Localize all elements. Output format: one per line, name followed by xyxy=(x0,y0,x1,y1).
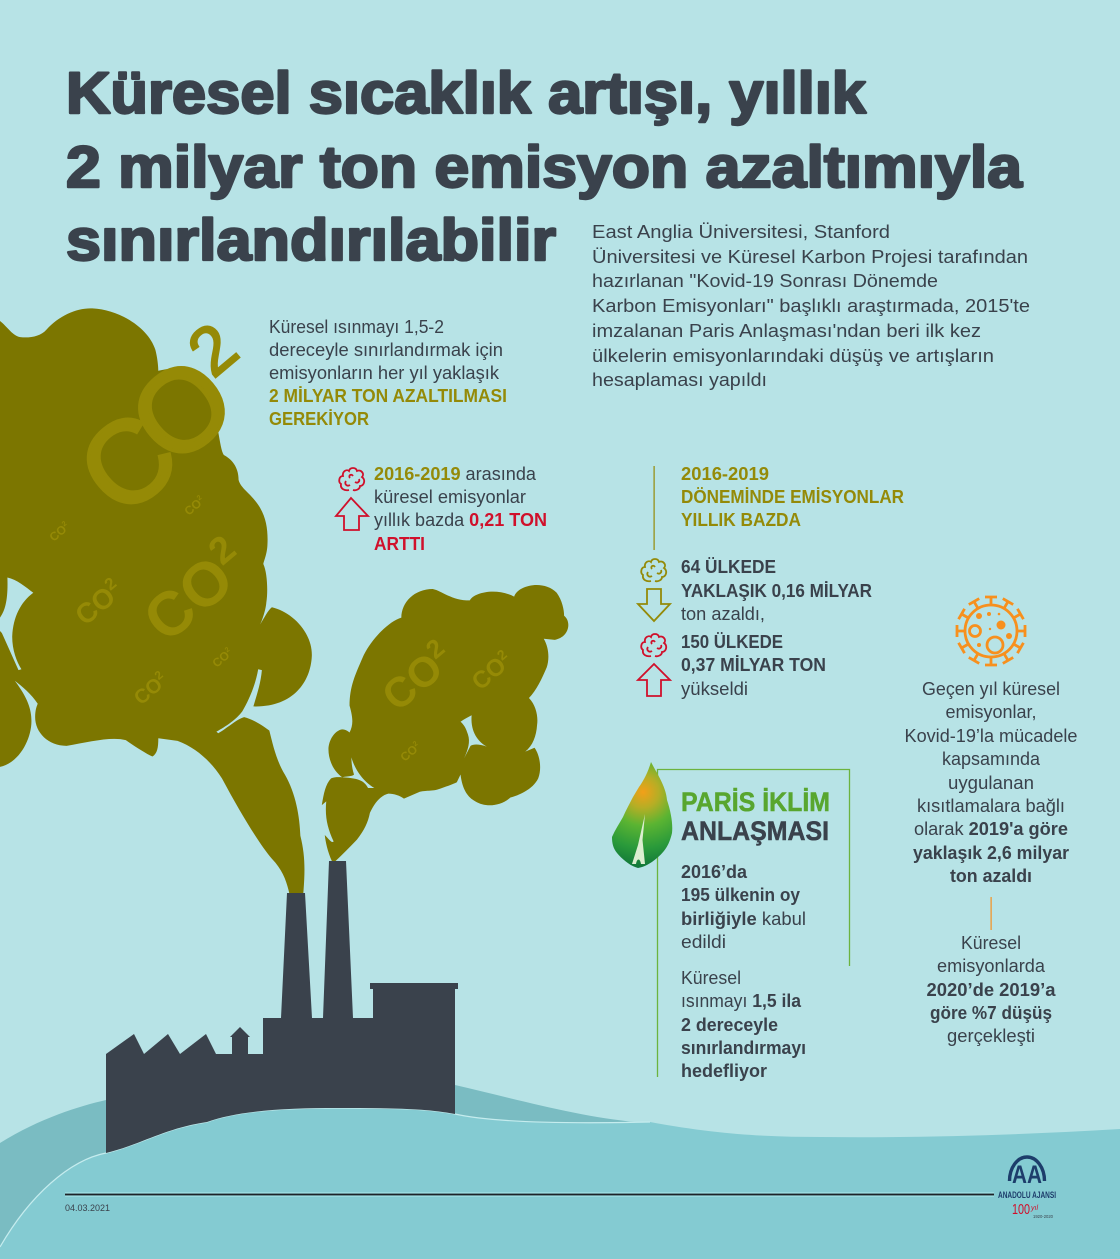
panel: Paris climate agreement: ANLAŞMASI xyxy=(681,816,829,846)
text: last year's decline xyxy=(904,679,1078,886)
CO2 labels on clouds: 2 xyxy=(412,740,420,748)
panel: Paris climate agreement: Küresel xyxy=(681,968,741,988)
text: 64 countries: ton azaldı, xyxy=(681,604,765,624)
title: 2 milyar ton emisyon azaltımıyla xyxy=(66,135,1023,200)
text: last year's decline: Kovid-19’la mücadele xyxy=(904,726,1078,746)
text: last year's decline: olarak 2019'a göre xyxy=(914,819,1068,839)
panel: Paris climate agreement: PARİS İKLİM xyxy=(681,787,830,817)
background hills xyxy=(0,1085,1120,1259)
title: sınırlandırılabilir xyxy=(66,208,556,273)
callout: 2016-2019 global emissions: 2016-2019 arasında xyxy=(374,464,537,484)
callout: 2 billion tons: GEREKİYOR xyxy=(269,409,369,429)
text: 2020 decline: göre %7 düşüş xyxy=(930,1003,1052,1023)
CO2 labels on clouds: CO xyxy=(182,496,204,518)
text: 2020 decline: gerçekleşti xyxy=(947,1026,1035,1046)
CO2 labels on clouds: 2 xyxy=(494,646,510,663)
text: 2020 decline: 2020’de 2019’a xyxy=(926,980,1057,1000)
callout: 2016-2019 global emissions: küresel emisyonlar xyxy=(374,487,526,507)
CO2 labels on clouds: 2 xyxy=(174,308,252,391)
text: last year's decline: ton azaldı xyxy=(950,866,1032,886)
logo: Anadolu Ajansi: yıl xyxy=(1030,1205,1038,1212)
CO2 labels on clouds: CO xyxy=(47,522,69,544)
callout: 2 billion tons: Küresel ısınmayı 1,5-2 xyxy=(269,317,444,337)
callout: 2 billion tons xyxy=(269,317,507,429)
text: 150 countries xyxy=(681,632,826,699)
title xyxy=(66,61,1023,273)
CO2 labels on clouds: 2 xyxy=(152,667,166,683)
small smoke cloud xyxy=(322,585,568,862)
factory silhouette xyxy=(106,861,458,1153)
panel: Paris climate agreement: 2 dereceyle xyxy=(681,1015,778,1035)
CO2 labels on clouds: O xyxy=(105,331,258,489)
logo: Anadolu Ajansi xyxy=(998,1157,1056,1219)
heading: annual emissions 2016-2019: DÖNEMİNDE EMİSYONLAR xyxy=(681,487,904,507)
panel: Paris climate agreement: 195 ülkenin oy xyxy=(681,885,800,905)
intro paragraph: imzalanan Paris Anlaşması'ndan beri ilk kez xyxy=(592,321,981,341)
icon: Paris leaf xyxy=(612,762,672,868)
panel: Paris climate agreement: sınırlandırmayı xyxy=(681,1038,806,1058)
text: last year's decline: kapsamında xyxy=(942,749,1041,769)
intro paragraph: hazırlanan "Kovid-19 Sonrası Dönemde xyxy=(592,271,938,291)
CO2 labels on clouds: CO xyxy=(373,643,451,720)
intro paragraph: ülkelerin emisyonlarındaki düşüş ve artışların xyxy=(592,346,994,366)
text: 150 countries: 150 ÜLKEDE xyxy=(681,632,783,652)
heading: annual emissions 2016-2019: 2016-2019 xyxy=(681,464,769,484)
CO2 labels on clouds: 2 xyxy=(196,494,204,502)
CO2 labels on clouds: CO xyxy=(210,648,232,670)
intro paragraph: hesaplaması yapıldı xyxy=(592,370,767,390)
callout: 2 billion tons: dereceyle sınırlandırmak için xyxy=(269,340,503,360)
callout: 2016-2019 global emissions: ARTTI xyxy=(374,534,425,554)
intro paragraph: East Anglia Üniversitesi, Stanford xyxy=(592,222,890,242)
footer line and date xyxy=(65,1192,994,1214)
text: 2020 decline: emisyonlarda xyxy=(937,956,1046,976)
heading: annual emissions 2016-2019 xyxy=(654,464,904,550)
intro paragraph: Üniversitesi ve Küresel Karbon Projesi tarafından xyxy=(592,247,1028,267)
CO2 labels on clouds: CO xyxy=(131,543,247,655)
icon: red cloud and up arrow xyxy=(336,468,368,530)
icon: virus xyxy=(957,597,1025,665)
text: last year's decline: emisyonlar, xyxy=(946,702,1036,722)
panel: Paris climate agreement: hedefliyor xyxy=(681,1061,767,1081)
CO2 labels on clouds: CO xyxy=(398,742,420,764)
logo: Anadolu Ajansi: 100 xyxy=(1012,1201,1030,1218)
heading: annual emissions 2016-2019: YILLIK BAZDA xyxy=(681,510,801,530)
panel: Paris climate agreement: ısınmayı 1,5 ila xyxy=(681,991,802,1011)
title: Küresel sıcaklık artışı, yıllık xyxy=(66,61,867,126)
text: last year's decline: Geçen yıl küresel xyxy=(922,679,1060,699)
text: 150 countries: 0,37 MİLYAR TON xyxy=(681,655,826,675)
icon: olive cloud and down arrow xyxy=(638,559,670,621)
text: 64 countries: 64 ÜLKEDE xyxy=(681,557,776,577)
text: 64 countries xyxy=(681,557,872,624)
logo: Anadolu Ajansi: 1920-2020 xyxy=(1033,1214,1053,1219)
panel: Paris climate agreement: edildi xyxy=(681,932,726,952)
CO2 labels on clouds: 2 xyxy=(224,646,232,654)
text: 2020 decline xyxy=(926,897,1057,1046)
logo: Anadolu Ajansi: AA xyxy=(1012,1161,1042,1189)
text: 64 countries: YAKLAŞIK 0,16 MİLYAR xyxy=(681,581,872,601)
big smoke cloud xyxy=(0,308,312,893)
text: 2020 decline: Küresel xyxy=(961,933,1021,953)
callout: 2016-2019 global emissions: yıllık bazda 0,21 TON xyxy=(374,510,547,530)
callout: 2 billion tons: 2 MİLYAR TON AZALTILMASI xyxy=(269,386,507,406)
CO2 labels on clouds: C xyxy=(54,386,202,539)
CO2 labels on clouds: 2 xyxy=(61,520,69,528)
CO2 labels on clouds: CO xyxy=(69,580,121,631)
logo: Anadolu Ajansi: ANADOLU AJANSI xyxy=(998,1190,1056,1200)
footer line and date: 04.03.2021 xyxy=(65,1203,110,1214)
intro paragraph xyxy=(592,222,1030,390)
panel: Paris climate agreement: 2016’da xyxy=(681,862,748,882)
text: last year's decline: kısıtlamalara bağlı xyxy=(917,796,1065,816)
CO2 labels on clouds: 2 xyxy=(201,528,244,573)
intro paragraph: Karbon Emisyonları" başlıklı araştırmada, 2015'te xyxy=(592,296,1030,316)
CO2 labels on clouds: 2 xyxy=(420,632,450,665)
callout: 2016-2019 global emissions xyxy=(374,464,547,554)
CO2 labels on clouds: 2 xyxy=(101,574,120,594)
CO2 labels on clouds: CO xyxy=(130,673,167,710)
panel: Paris climate agreement: birliğiyle kabul xyxy=(681,909,806,929)
text: last year's decline: yaklaşık 2,6 milyar xyxy=(913,843,1069,863)
CO2 labels on clouds xyxy=(47,308,518,764)
panel: Paris climate agreement xyxy=(612,762,850,1081)
icon: red cloud and up arrow xyxy=(638,634,670,696)
text: last year's decline: uygulanan xyxy=(948,773,1034,793)
CO2 labels on clouds: CO xyxy=(467,652,512,696)
text: 150 countries: yükseldi xyxy=(681,679,748,699)
callout: 2 billion tons: emisyonların her yıl yaklaşık xyxy=(269,363,500,383)
